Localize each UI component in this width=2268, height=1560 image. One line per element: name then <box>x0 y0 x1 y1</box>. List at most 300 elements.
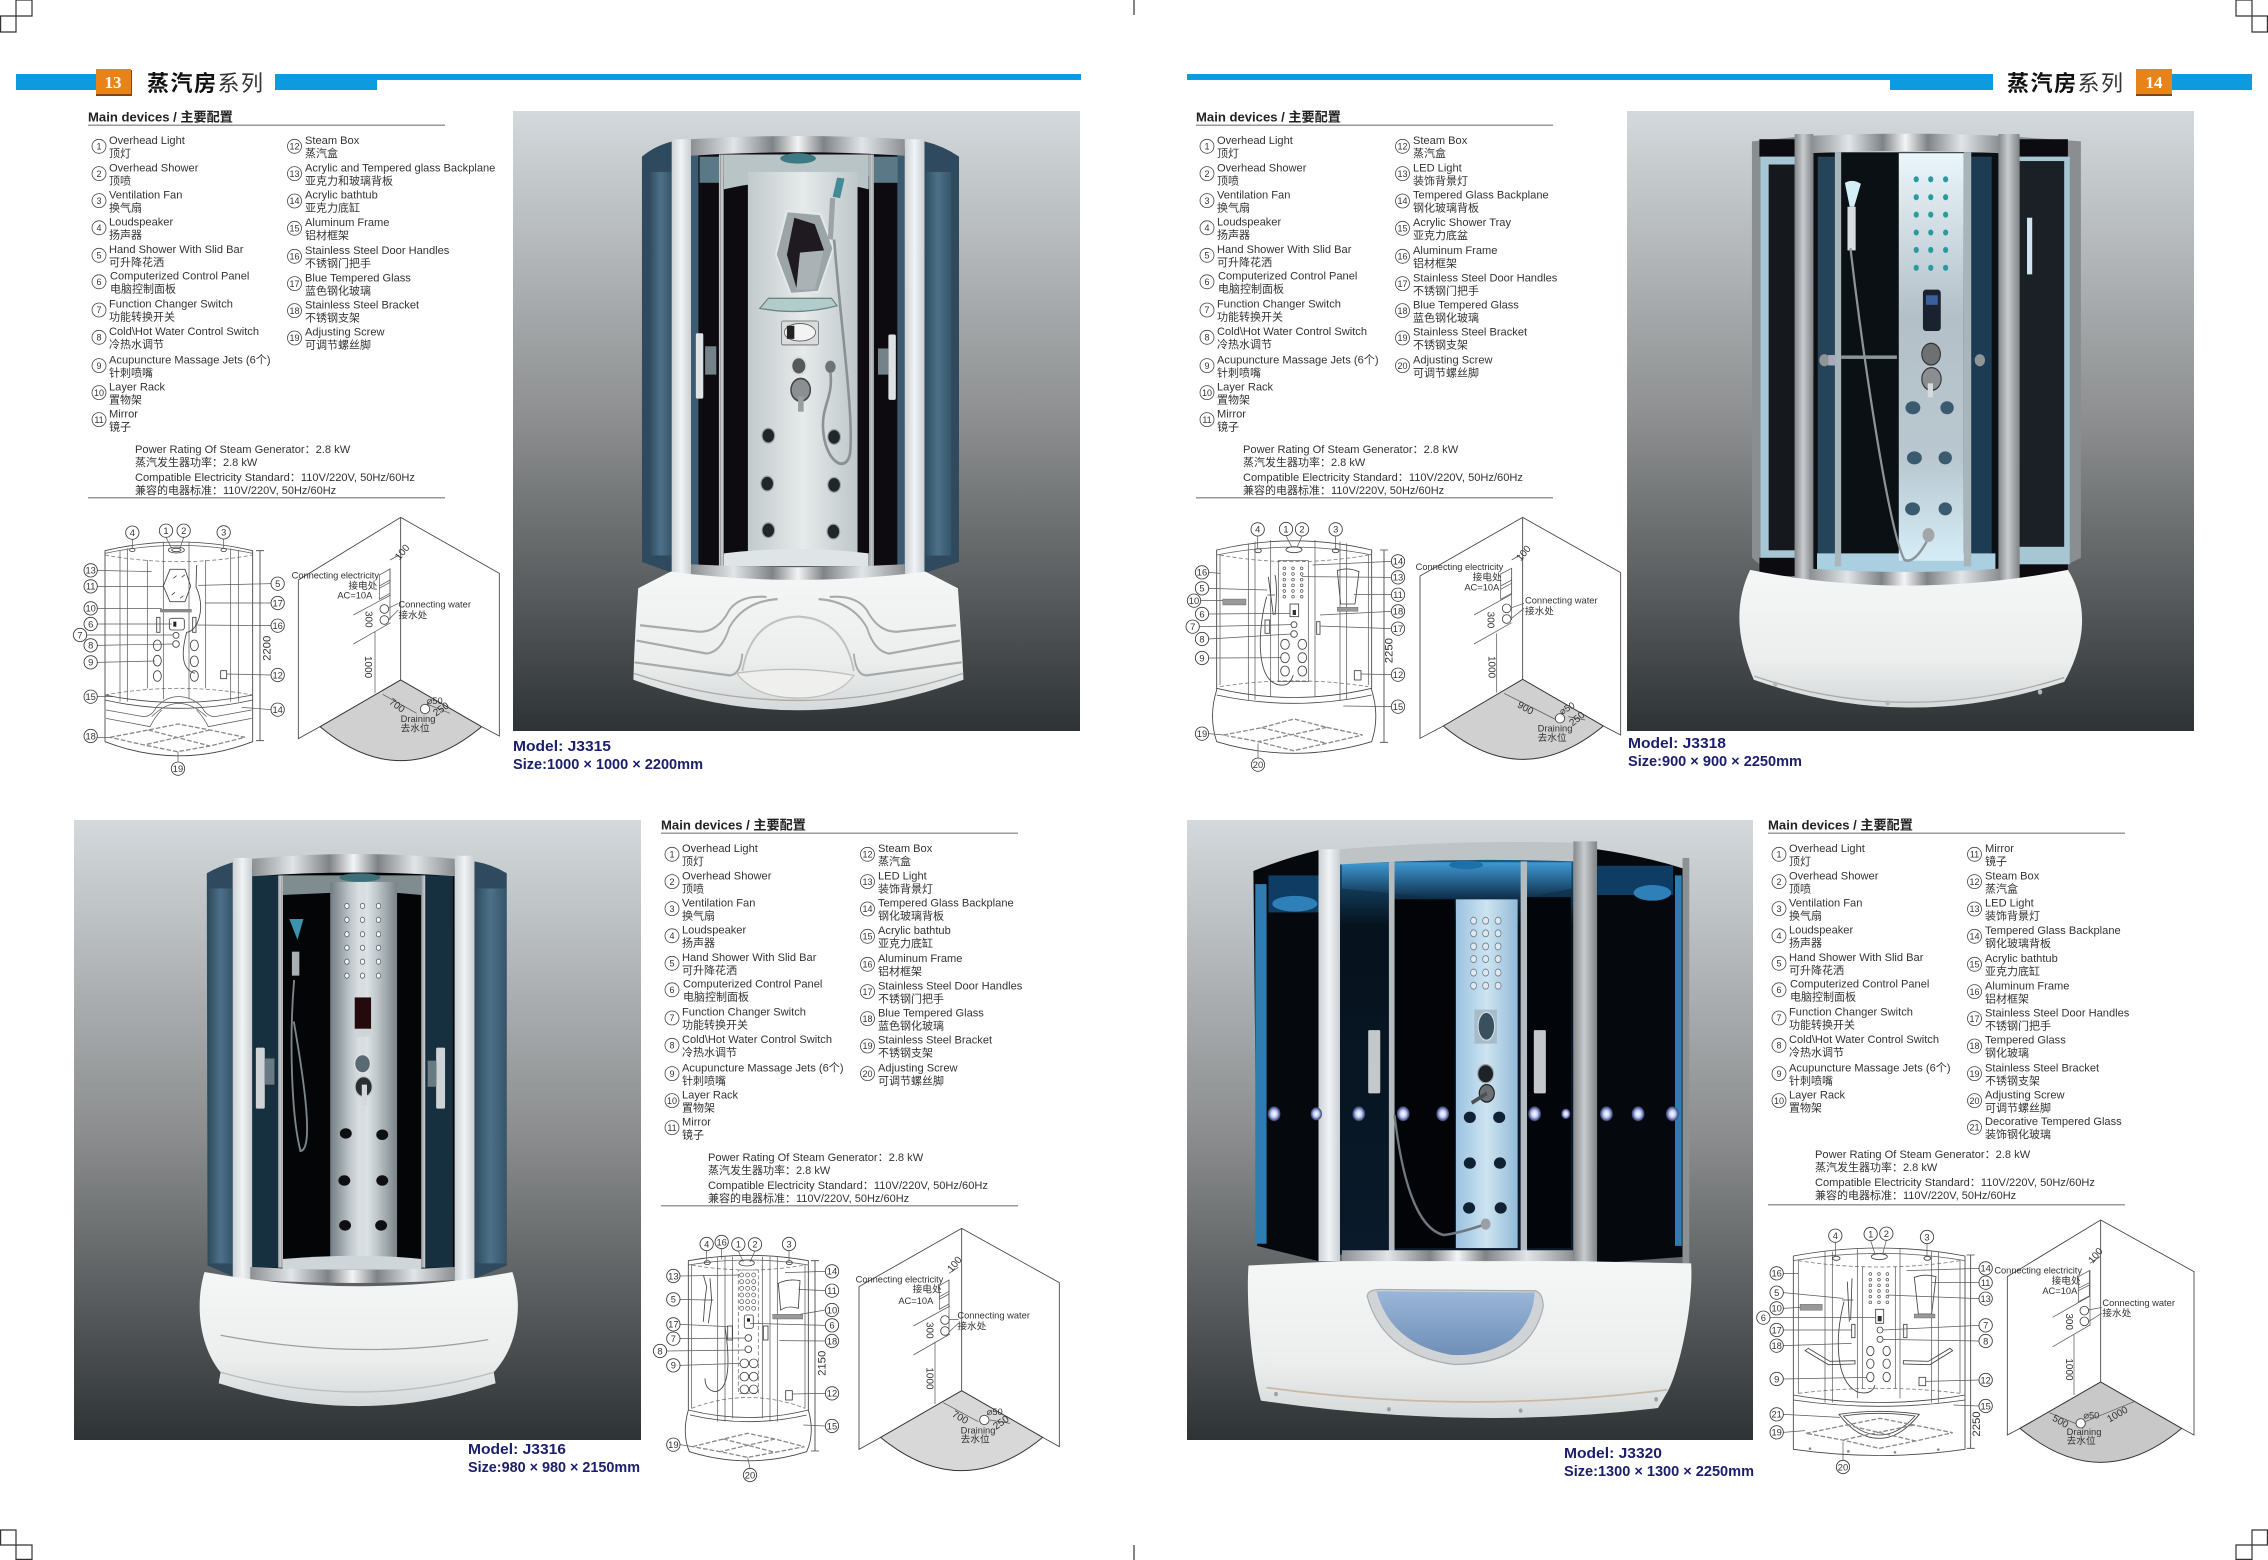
list column 2: Acrylic Shower Tray <box>1413 217 1511 229</box>
power specs: Compatible Electricity Standard：110V/220V, 50Hz/60Hz <box>135 472 415 484</box>
list column 1: Computerized Control Panel <box>110 270 249 282</box>
installation corner drawing: 1000 <box>2105 1404 2130 1425</box>
list column 2: 可调节螺丝脚 <box>1985 1100 2051 1114</box>
list column 1: 6 <box>669 985 675 995</box>
list column 1: 换气扇 <box>1217 200 1250 214</box>
list column 1: 11 <box>667 1123 677 1133</box>
panel: J3320 photo <box>1187 820 1753 1440</box>
power specs <box>661 1152 1018 1206</box>
list column 1: Layer Rack <box>682 1089 739 1101</box>
list column 2: 蓝色钢化玻璃 <box>1413 310 1479 324</box>
installation corner drawing: 250 <box>1568 710 1588 729</box>
callout numbers: 19 <box>173 764 183 774</box>
callout numbers: 14 <box>1980 1264 1991 1274</box>
list column 2: 亚克力底缸 <box>305 201 360 215</box>
callout numbers: 3 <box>221 528 226 538</box>
list column 1: Mirror <box>682 1116 711 1128</box>
list column 1: 6 <box>96 277 102 287</box>
installation corner drawing: 300 <box>2063 1313 2074 1330</box>
installation corner drawing: 去水位 <box>961 1434 990 1446</box>
power specs: Power Rating Of Steam Generator：2.8 kW <box>135 444 351 456</box>
list column 1: 6 <box>1776 985 1782 995</box>
caption J3315 <box>513 738 703 773</box>
callout numbers: 18 <box>1771 1341 1782 1351</box>
callout numbers: 6 <box>829 1321 835 1331</box>
caption J3318: Model: J3318 <box>1628 735 1726 752</box>
list column 2: 16 <box>1397 252 1408 262</box>
list column 2: 铝材框架 <box>878 964 922 978</box>
shelf <box>760 298 837 312</box>
heading: Main devices / 主要配置 <box>661 816 806 832</box>
list column 2: Tempered Glass Backplane <box>878 898 1014 910</box>
list column 2: 17 <box>1397 279 1408 289</box>
power specs: Power Rating Of Steam Generator：2.8 kW <box>1243 444 1459 456</box>
list column 2: 20 <box>1397 361 1408 371</box>
list column 1: 换气扇 <box>682 908 715 922</box>
callout numbers: 13 <box>668 1271 679 1281</box>
door handles <box>696 333 703 399</box>
callout numbers: 18 <box>1393 607 1403 617</box>
list column 2: 不锈钢门把手 <box>1985 1018 2051 1032</box>
callout numbers: 7 <box>1983 1321 1988 1331</box>
list column 1: Acupuncture Massage Jets (6个) <box>1789 1061 1951 1074</box>
list column 1: 1 <box>669 850 675 860</box>
list column 2: 亚克力底盆 <box>1413 228 1468 242</box>
list column 1: 5 <box>1204 250 1210 260</box>
list column 2: 不锈钢支架 <box>1413 339 1468 352</box>
diagrams J3316 <box>653 1228 1059 1482</box>
massage jets <box>1463 1112 1507 1214</box>
callout numbers: 8 <box>1983 1336 1988 1346</box>
list column 1: Mirror <box>109 408 138 420</box>
callout numbers: 5 <box>275 579 280 589</box>
installation corner drawing: 100 <box>393 542 413 563</box>
panel: J3320 devices list <box>1768 816 2130 1206</box>
list column 1: 冷热水调节 <box>109 338 164 351</box>
list column 1: 可升降花洒 <box>682 963 737 977</box>
installation corner drawing <box>856 1228 1059 1471</box>
list column 1: Cold\Hot Water Control Switch <box>1217 326 1367 338</box>
callout numbers: 8 <box>657 1346 663 1356</box>
list column 2: 可调节螺丝脚 <box>305 338 371 352</box>
list column 1: Loudspeaker <box>109 216 173 228</box>
massage jets <box>338 1128 388 1231</box>
diagrams J3318 <box>1186 517 1621 771</box>
caption J3316: Size:980 × 980 × 2150mm <box>468 1459 640 1476</box>
list column 2: 装饰背景灯 <box>1413 173 1468 187</box>
installation corner drawing: 900 <box>1515 700 1535 718</box>
panel: J3318 photo <box>1627 111 2194 731</box>
list column 1: 冷热水调节 <box>682 1046 737 1059</box>
callout numbers: 11 <box>1393 590 1403 600</box>
list column 2: 蒸汽盒 <box>878 854 911 868</box>
caption J3316: Model: J3316 <box>468 1441 566 1458</box>
list column 2: Aluminum Frame <box>878 953 962 965</box>
list column 2: Adjusting Screw <box>878 1062 959 1074</box>
callout numbers: 11 <box>1981 1278 1991 1288</box>
callout numbers: 18 <box>85 731 96 741</box>
steam nozzles <box>1914 176 1948 271</box>
list column 2: 不锈钢门把手 <box>305 256 371 270</box>
installation corner drawing: 100 <box>1515 543 1534 564</box>
callout numbers: 3 <box>786 1239 792 1249</box>
valves <box>1478 1065 1494 1083</box>
list column 2: 镜子 <box>1985 854 2007 868</box>
list column 1: 4 <box>1204 223 1210 233</box>
list column 1 <box>665 843 844 1141</box>
callout numbers: 4 <box>704 1239 709 1249</box>
list column 1: 3 <box>1204 196 1210 206</box>
list column 2: Steam Box <box>1985 870 2040 882</box>
installation corner drawing: 250 <box>431 700 452 719</box>
bathtub <box>633 572 963 710</box>
installation corner drawing: AC=10A <box>337 591 373 601</box>
installation corner drawing: 1000 <box>924 1367 935 1390</box>
callout numbers: 16 <box>272 621 283 631</box>
list column 2: 20 <box>1969 1096 1980 1106</box>
installation corner drawing: 100 <box>946 1254 965 1275</box>
list column 2: 17 <box>862 987 873 997</box>
power specs: Power Rating Of Steam Generator：2.8 kW <box>708 1152 924 1164</box>
list column 2: 蒸汽盒 <box>1985 881 2018 895</box>
list column 2: 13 <box>862 877 873 887</box>
header: page 14 <box>1187 69 2252 96</box>
front view line drawing <box>1770 1240 1983 1460</box>
callout numbers: 14 <box>272 705 283 715</box>
callout numbers: 11 <box>86 582 96 592</box>
power specs: Compatible Electricity Standard：110V/220V, 50Hz/60Hz <box>708 1180 988 1192</box>
header: page 13: 蒸汽房系列 <box>147 71 265 96</box>
list column 2: 装饰背景灯 <box>878 881 933 895</box>
list column 1: 镜子 <box>1217 419 1239 433</box>
power specs: 兼容的电器标准：110V/220V, 50Hz/60Hz <box>1243 483 1444 497</box>
list column 1: 针刺喷嘴 <box>682 1073 726 1087</box>
list column 1: 5 <box>96 250 102 260</box>
caption J3320 <box>1564 1445 1754 1480</box>
callout numbers: 13 <box>1980 1294 1991 1304</box>
valves <box>355 1055 370 1073</box>
callout numbers: 20 <box>1253 760 1263 770</box>
list column 1: 可升降花洒 <box>1217 255 1272 269</box>
callout numbers: 2 <box>1299 525 1305 535</box>
list column 1: 1 <box>96 142 102 152</box>
callout numbers: 20 <box>745 1470 755 1480</box>
list column 1: 置物架 <box>682 1100 715 1114</box>
list column 2: 18 <box>1397 306 1408 316</box>
list column 2: 不锈钢门把手 <box>878 991 944 1005</box>
list column 2: 12 <box>862 850 873 860</box>
callout numbers: 16 <box>1197 568 1207 578</box>
list column 2: Stainless Steel Door Handles <box>1985 1007 2130 1019</box>
list column 1: 8 <box>96 332 102 342</box>
installation corner drawing: 去水位 <box>401 723 430 735</box>
callout numbers: 2 <box>1884 1229 1889 1239</box>
list column 2: 12 <box>1969 877 1980 887</box>
lit centre column <box>1456 899 1518 1248</box>
callout numbers: 12 <box>1980 1375 1991 1385</box>
power specs <box>1768 1149 2125 1206</box>
list column 2: 15 <box>289 224 300 234</box>
list column 1: 3 <box>669 904 675 914</box>
list column 1: Function Changer Switch <box>1217 299 1341 311</box>
list column 1: Hand Shower With Slid Bar <box>109 244 244 256</box>
front view line drawing <box>87 537 274 762</box>
installation corner drawing <box>1994 1220 2194 1462</box>
front view line drawing: 2200 <box>262 636 274 661</box>
list column 1: 电脑控制面板 <box>1218 282 1284 296</box>
list column 2: 13 <box>289 169 300 179</box>
list column 2: 钢化玻璃背板 <box>1985 936 2051 950</box>
list column 1: Hand Shower With Slid Bar <box>1217 244 1352 256</box>
list column 2: Stainless Steel Door Handles <box>1413 272 1558 284</box>
list column 2: Stainless Steel Bracket <box>1413 327 1527 339</box>
installation corner drawing: 700 <box>950 1409 970 1427</box>
list column 2: 16 <box>862 960 873 970</box>
list column 1: 5 <box>669 958 675 968</box>
header: page 14: 14 <box>2146 73 2163 92</box>
callout numbers: 1 <box>1868 1229 1873 1239</box>
callout numbers: 6 <box>1199 609 1205 619</box>
callout numbers: 19 <box>668 1440 679 1450</box>
power specs: Compatible Electricity Standard：110V/220V, 50Hz/60Hz <box>1243 472 1523 484</box>
lit centre column <box>1899 153 1964 561</box>
list column 1: 功能转换开关 <box>1217 310 1283 324</box>
installation corner drawing: ⌀50 <box>427 696 443 706</box>
list column 2: 15 <box>1969 960 1980 970</box>
power specs: Compatible Electricity Standard：110V/220V, 50Hz/60Hz <box>1815 1177 2095 1189</box>
list column 1: Mirror <box>1217 408 1246 420</box>
heading: Main devices / 主要配置 <box>1768 816 1913 832</box>
list column 2: 17 <box>289 279 300 289</box>
list column 2: 12 <box>289 142 300 152</box>
list column 1: Loudspeaker <box>1217 216 1281 228</box>
list column 2: Steam Box <box>305 135 360 147</box>
list column 1: 10 <box>1774 1096 1784 1106</box>
list column 1: 顶灯 <box>1789 855 1811 868</box>
tub window <box>1367 1289 1543 1364</box>
list column 2: 15 <box>1397 224 1408 234</box>
steam nozzles <box>345 903 381 978</box>
power specs: 蒸汽发生器功率：2.8 kW <box>1243 455 1366 469</box>
callout numbers: 12 <box>827 1389 837 1399</box>
list column 1: 扬声器 <box>1217 228 1250 242</box>
list column 2: LED Light <box>1413 162 1462 174</box>
list column 2: LED Light <box>1985 898 2034 910</box>
callout numbers: 10 <box>827 1305 837 1315</box>
list column 1: 6 <box>1204 277 1210 287</box>
list column 1: 电脑控制面板 <box>1790 990 1856 1004</box>
list column 1: Ventilation Fan <box>1217 189 1290 201</box>
silver centre column <box>330 882 397 1259</box>
list column 1: Ventilation Fan <box>109 189 182 201</box>
list column 1: 扬声器 <box>682 936 715 950</box>
front view line drawing <box>667 1249 828 1468</box>
list column 2: 可调节螺丝脚 <box>1413 365 1479 379</box>
panel: J3316 devices list <box>661 816 1023 1206</box>
installation corner drawing: 接水处 <box>2102 1308 2132 1320</box>
list column 1: 顶喷 <box>109 174 131 187</box>
control panel <box>1923 290 1941 331</box>
list column 1 <box>1200 135 1379 433</box>
list column 2: 蒸汽盒 <box>1413 146 1446 160</box>
list column 1: 功能转换开关 <box>109 310 175 324</box>
callout numbers <box>1186 522 1405 771</box>
installation corner drawing: Connecting water <box>2102 1298 2175 1308</box>
callout numbers <box>73 524 284 775</box>
caption J3316 <box>468 1441 640 1476</box>
panel: J3318 devices list <box>1196 108 1558 498</box>
list column 2: 不锈钢支架 <box>305 311 360 324</box>
callout numbers: 17 <box>272 598 283 608</box>
list column 2: Adjusting Screw <box>305 327 386 339</box>
list column 1: 功能转换开关 <box>1789 1018 1855 1032</box>
hand shower and hose <box>1845 181 1861 207</box>
installation corner drawing <box>292 517 499 761</box>
list column 1: 10 <box>667 1096 677 1106</box>
installation corner drawing: 接水处 <box>1525 605 1554 617</box>
list column 2: 18 <box>289 306 300 316</box>
hand shower <box>289 919 303 940</box>
heading: Main devices / 主要配置 <box>1196 108 1341 124</box>
front view line drawing: 2250 <box>1971 1411 1983 1437</box>
callout numbers: 15 <box>85 692 96 702</box>
towel bar and handles <box>1841 355 1897 359</box>
list column 2 <box>860 843 1023 1087</box>
installation corner drawing: ⌀50 <box>2083 1411 2099 1421</box>
callout numbers: 17 <box>668 1320 679 1330</box>
bathtub <box>1739 570 2082 708</box>
installation corner drawing: 接水处 <box>957 1320 987 1332</box>
list column 1: Computerized Control Panel <box>1790 978 1929 990</box>
list column 1: 1 <box>1776 850 1782 860</box>
installation corner drawing: Connecting electricity <box>292 570 379 580</box>
caption J3315: Size:1000 × 1000 × 2200mm <box>513 756 703 773</box>
callout numbers: 10 <box>1771 1304 1782 1314</box>
list column 1: 置物架 <box>1217 392 1250 406</box>
callout numbers: 1 <box>736 1240 741 1250</box>
installation corner drawing: Draining <box>961 1425 995 1435</box>
list column 1: Loudspeaker <box>1789 924 1853 936</box>
power specs: Power Rating Of Steam Generator：2.8 kW <box>1815 1149 2031 1161</box>
list column 2: 19 <box>862 1041 873 1051</box>
header: page 13 <box>16 69 1081 96</box>
list column 1: 7 <box>1776 1013 1782 1023</box>
front view line drawing <box>1199 536 1396 758</box>
list column 1: Layer Rack <box>109 381 166 393</box>
list column 1: 顶喷 <box>682 882 704 895</box>
list column 1: Layer Rack <box>1789 1089 1846 1101</box>
caption J3318: Size:900 × 900 × 2250mm <box>1628 753 1802 770</box>
list column 1: 电脑控制面板 <box>683 990 749 1004</box>
list column 1 <box>1772 843 1951 1114</box>
callout numbers: 1 <box>1283 524 1289 534</box>
callout numbers: 19 <box>1197 729 1207 739</box>
valves <box>1922 343 1940 365</box>
bathtub <box>200 1272 518 1406</box>
list column 1: Hand Shower With Slid Bar <box>1789 952 1924 964</box>
list column 2: Blue Tempered Glass <box>305 272 411 284</box>
callout numbers: 15 <box>1980 1401 1991 1411</box>
callout numbers: 14 <box>827 1267 837 1277</box>
callout numbers: 10 <box>1189 596 1199 606</box>
installation corner drawing: Draining <box>1538 724 1572 734</box>
list column 1: Function Changer Switch <box>682 1007 806 1019</box>
list column 2: Steam Box <box>1413 135 1468 147</box>
installation corner drawing: AC=10A <box>2042 1286 2078 1296</box>
list column 2: 钢化玻璃 <box>1985 1046 2029 1060</box>
list column 1: 扬声器 <box>1789 936 1822 950</box>
list column 2: 亚克力和玻璃背板 <box>305 173 393 187</box>
list column 2: 亚克力底缸 <box>878 936 933 950</box>
list column 2: Stainless Steel Bracket <box>1985 1062 2099 1074</box>
control panel <box>1474 1010 1497 1044</box>
installation corner drawing: 去水位 <box>1538 732 1567 744</box>
list column 1: 11 <box>94 415 104 425</box>
list column 1: 顶灯 <box>682 855 704 868</box>
power specs: 蒸汽发生器功率：2.8 kW <box>708 1163 831 1177</box>
list column 1: 9 <box>1204 361 1210 371</box>
power specs: 蒸汽发生器功率：2.8 kW <box>135 455 258 469</box>
callout numbers: 4 <box>1833 1231 1838 1241</box>
header: page 14: 蒸汽房系列 <box>2007 71 2125 96</box>
list column 1: Overhead Shower <box>1217 162 1307 174</box>
callout numbers: 4 <box>130 528 135 538</box>
power specs <box>1196 444 1553 498</box>
list column 2: 铝材框架 <box>305 228 349 242</box>
list column 2: Tempered Glass Backplane <box>1985 925 2121 937</box>
callout numbers: 3 <box>1924 1232 1930 1242</box>
installation corner drawing: 300 <box>924 1322 935 1339</box>
installation corner drawing: 500 <box>2050 1413 2070 1431</box>
installation corner drawing: Connecting electricity <box>1994 1265 2082 1275</box>
list column 1: 电脑控制面板 <box>110 282 176 296</box>
callout numbers: 5 <box>1774 1288 1779 1298</box>
diagrams J3315 <box>73 517 499 775</box>
callout numbers: 1 <box>163 526 169 536</box>
list column 2: Mirror <box>1985 843 2014 855</box>
list column 1: 换气扇 <box>109 200 142 214</box>
list column 1: 8 <box>1204 332 1210 342</box>
list column 1: 镜子 <box>109 419 131 433</box>
list column 1: Overhead Shower <box>682 870 772 882</box>
list column 1: Function Changer Switch <box>1789 1007 1913 1019</box>
steam nozzles <box>1471 917 1501 989</box>
list column 2: 不锈钢门把手 <box>1413 283 1479 297</box>
list column 2: 可调节螺丝脚 <box>878 1073 944 1087</box>
massage jets <box>1905 401 1954 515</box>
heading: Main devices / 主要配置 <box>88 108 233 124</box>
panel: J3315 devices list <box>88 108 495 498</box>
callout numbers: 12 <box>272 670 283 680</box>
list column 2: 19 <box>289 333 300 343</box>
list column 1: 针刺喷嘴 <box>109 365 153 379</box>
list column 2: Decorative Tempered Glass <box>1985 1116 2122 1128</box>
callout numbers: 13 <box>85 566 96 576</box>
list column 1: 换气扇 <box>1789 908 1822 922</box>
diagrams J3320 <box>1757 1220 2194 1474</box>
list column 1: Acupuncture Massage Jets (6个) <box>1217 353 1379 366</box>
list column 2: 铝材框架 <box>1985 991 2029 1005</box>
list column 2: Tempered Glass <box>1985 1035 2066 1047</box>
caption J3320: Model: J3320 <box>1564 1445 1662 1462</box>
list column 1: 可升降花洒 <box>109 255 164 269</box>
callout numbers: 5 <box>1199 584 1205 594</box>
callout numbers: 4 <box>1255 525 1260 535</box>
callout numbers: 17 <box>1393 624 1403 634</box>
list column 2 <box>1968 843 2130 1141</box>
installation corner drawing: 300 <box>1485 612 1496 629</box>
callout numbers: 7 <box>77 630 83 640</box>
